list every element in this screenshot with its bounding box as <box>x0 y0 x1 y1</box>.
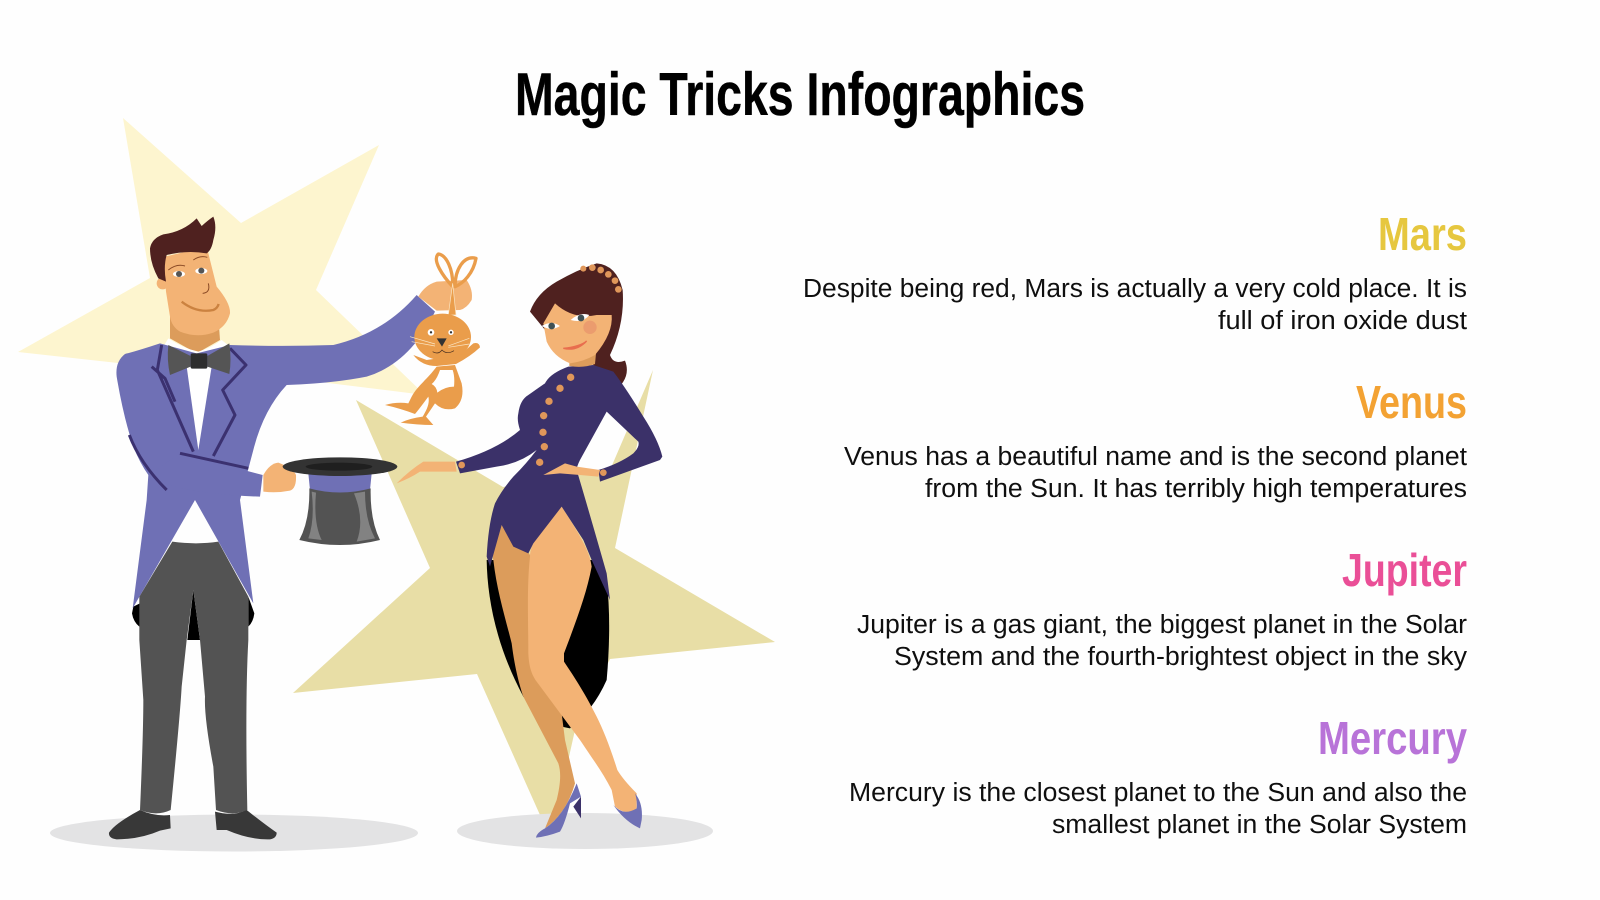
text: Mercury description: Mercury is the closest planet to the Sun and also the <box>849 779 1467 807</box>
heading: Mercury: Mercury <box>1318 712 1467 764</box>
text: Venus description: from the Sun. It has terribly high temperatures <box>925 475 1467 503</box>
panel: Mars <box>803 208 1467 335</box>
head <box>163 247 230 335</box>
text: Jupiter description: System and the fourth-brightest object in the sky <box>894 643 1467 671</box>
icon: darker star <box>293 370 775 815</box>
rabbit ear stem <box>448 283 456 315</box>
collar <box>163 338 230 367</box>
shirt <box>187 367 212 450</box>
shoes <box>536 783 642 838</box>
icon: pale star <box>18 118 425 395</box>
text: Venus description: Venus has a beautiful name and is the second planet <box>844 443 1467 471</box>
rabbit body <box>385 365 462 425</box>
rabbit ears <box>436 254 476 287</box>
text: Jupiter description: Jupiter is a gas giant, the biggest planet in the Solar <box>857 611 1468 639</box>
jacket and sleeves <box>116 295 435 608</box>
illustration: magician <box>109 217 472 839</box>
ear <box>157 277 169 289</box>
mouth <box>563 341 587 349</box>
cheek <box>583 321 597 334</box>
hair back <box>530 263 627 384</box>
skirt lining <box>487 560 609 728</box>
hand holding hat <box>263 463 296 492</box>
rabbit arms <box>413 343 480 366</box>
rabbit belly <box>432 370 454 393</box>
title: Magic Tricks Infographics <box>515 61 1085 128</box>
hand holding rabbit <box>418 280 472 311</box>
eyes <box>542 314 589 329</box>
shadow: assistant <box>457 813 713 849</box>
illustration: assistant <box>385 254 662 838</box>
face details <box>168 257 219 311</box>
trousers <box>139 542 248 813</box>
rabbit face <box>410 329 469 353</box>
forearm <box>148 453 263 497</box>
rabbit <box>385 254 480 425</box>
top hat <box>283 457 397 545</box>
dress <box>456 365 662 600</box>
neck <box>170 313 220 353</box>
text: Mars description: full of iron oxide dust <box>1218 307 1467 335</box>
panel: Venus <box>844 376 1467 503</box>
shadow: magician <box>50 814 418 852</box>
shoes <box>109 810 277 839</box>
text: Mars description: Despite being red, Mars is actually a very cold place. It is <box>803 275 1467 303</box>
hands <box>397 462 600 483</box>
shoe heel <box>573 797 581 818</box>
lapels and sleeve seam <box>129 345 248 490</box>
face <box>543 303 612 363</box>
front leg <box>528 507 637 812</box>
hair beads <box>580 264 622 293</box>
rabbit head <box>414 314 471 360</box>
heading: Jupiter: Jupiter <box>1342 544 1467 596</box>
panel: Jupiter <box>857 544 1468 671</box>
bow tie <box>168 343 230 375</box>
hair <box>150 217 215 282</box>
panel: Mercury <box>849 712 1467 839</box>
heading: Venus: Venus <box>1356 376 1467 428</box>
neck <box>569 347 597 367</box>
text: Mercury description: smallest planet in the Solar System <box>1052 811 1467 839</box>
jacket lining <box>132 590 254 640</box>
back leg <box>493 525 575 828</box>
dress buttons <box>458 374 607 476</box>
heading: Mars: Mars <box>1378 208 1467 260</box>
